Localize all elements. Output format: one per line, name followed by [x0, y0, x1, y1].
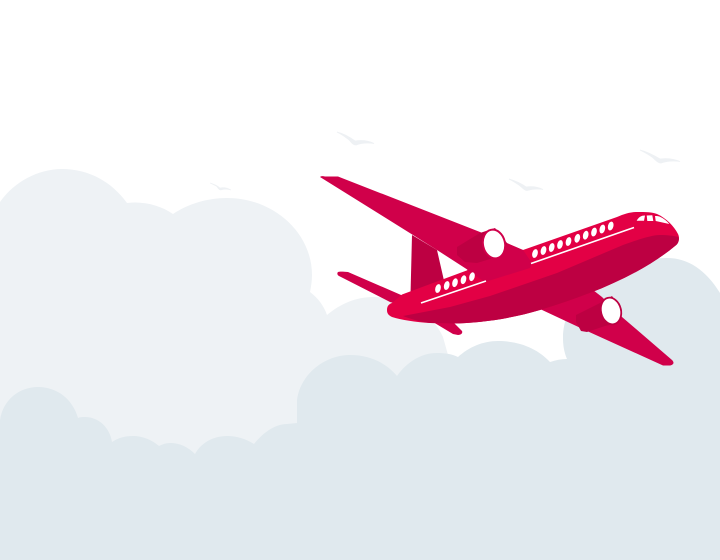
- far engine intake: [598, 295, 624, 327]
- near wing root over fuselage: [467, 243, 532, 282]
- front cabin windows: [531, 221, 614, 259]
- cockpit windows: [637, 215, 669, 224]
- rear cheatline: [421, 281, 486, 303]
- near engine pod: [457, 228, 507, 263]
- bird: far right: [640, 150, 680, 163]
- far engine pod: [576, 296, 622, 332]
- foreground cloud: right rear bank: [563, 258, 720, 420]
- lower tail fin: [433, 322, 462, 335]
- fuselage: [387, 212, 679, 324]
- near wing: [320, 176, 535, 290]
- far wing: [540, 290, 673, 366]
- background cloud: pale large cloud: [0, 169, 448, 470]
- rear cabin windows: [434, 272, 476, 294]
- horizontal stabilizer: [337, 272, 408, 304]
- bird: small far left: [210, 183, 231, 190]
- front cheatline: [531, 228, 634, 264]
- bird: centre top: [337, 132, 374, 145]
- foreground cloud: bottom bank: [0, 341, 720, 560]
- tail fin: [410, 235, 445, 295]
- near engine intake: [480, 228, 508, 260]
- airplane: [320, 176, 679, 366]
- fuselage belly shadow: [403, 235, 679, 324]
- bird: centre: [509, 179, 543, 190]
